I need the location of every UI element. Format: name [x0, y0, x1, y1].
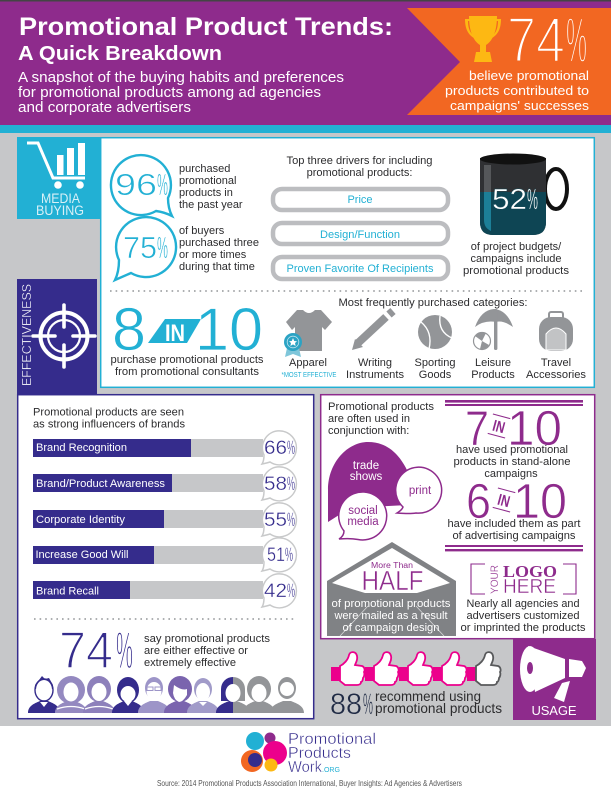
stat: 74% say effective: %	[116, 622, 133, 680]
callout: 74% believe: campaigns' successes	[450, 98, 590, 113]
stat: 96% purchased: %	[157, 167, 168, 202]
logo: promotional products work: .ORG	[322, 767, 340, 774]
driver: proven favorite: Proven Favorite Of Recipients	[286, 263, 434, 275]
panel: brand influence	[18, 395, 314, 719]
top three drivers: Top three drivers for including	[286, 155, 432, 167]
bar: corporate identity: %	[287, 510, 295, 531]
badge: in: IN	[491, 418, 507, 437]
header description: A snapshot of the buying habits and preferences	[18, 70, 344, 86]
your logo here: HERE	[503, 576, 556, 598]
category: apparel: Apparel	[289, 357, 327, 369]
stat: 7 in 10: campaigns	[484, 468, 538, 480]
icon: shopping cart	[27, 143, 85, 189]
bar: increase good will: %	[285, 545, 293, 566]
bar: increase good will: 51	[267, 545, 285, 566]
stat: 96% purchased: promotional	[179, 175, 236, 187]
title: Promotional Product Trends:	[19, 13, 393, 41]
stat: 6 in 10: of advertising campaigns	[452, 530, 576, 542]
category: leisure products: Leisure	[475, 357, 511, 369]
stat: 52% mug	[463, 154, 570, 277]
stat: 75% of buyers: or more times	[179, 249, 247, 261]
text: influencers heading: Promotional products are seen	[33, 406, 184, 418]
bar: brand/product awareness: 58	[264, 474, 287, 495]
source line: Source: 2014 Promotional Products Association International, Buyer Insights: Ad Agencies & Advertisers	[157, 778, 462, 788]
your logo here: Nearly all agencies and	[466, 598, 580, 610]
bar: brand recognition: Brand Recognition	[36, 442, 127, 454]
bar: brand recall: Brand Recall	[36, 586, 99, 598]
bar: corporate identity	[33, 503, 296, 537]
logo: promotional products work: Promotional	[288, 731, 376, 748]
text: influencers heading	[33, 406, 186, 430]
stat: 6 in 10: 10	[513, 475, 567, 529]
text: conjunction heading: Promotional products	[328, 401, 434, 413]
stat: 75% of buyers: of buyers	[179, 225, 225, 237]
stat: 52% mug: campaigns include	[470, 253, 562, 265]
speech bubbles: channels	[328, 442, 442, 540]
stat: 8 in 10: purchase promotional products	[110, 354, 264, 366]
usage: thumbs up rating	[330, 652, 502, 721]
usage: thumbs up rating: %	[363, 688, 373, 721]
stat: 75% of buyers: %	[157, 230, 168, 265]
category: apparel: *MOST EFFECTIVE	[282, 372, 337, 379]
bar: brand/product awareness	[33, 467, 296, 501]
your logo here: LOGO	[503, 562, 557, 581]
logo: promotional products work	[241, 731, 376, 776]
bubble: trade shows	[328, 442, 408, 522]
category: writing instruments: Instruments	[346, 369, 405, 381]
usage: thumbs up rating: promotional products	[375, 700, 502, 716]
stat: 52% mug: promotional products	[463, 265, 570, 277]
bar: brand recognition	[33, 431, 296, 465]
icon: thumbs up	[331, 652, 501, 685]
title	[18, 13, 393, 65]
header description: and corporate advertisers	[18, 100, 191, 116]
stat: 8 in 10: 8	[112, 296, 146, 363]
category: writing instruments	[346, 311, 405, 381]
category: sporting goods: Goods	[419, 369, 452, 381]
stat: 52% mug: %	[527, 184, 538, 216]
text: influencers heading: as strong influencers of brands	[33, 418, 186, 430]
bar: brand recall: %	[287, 581, 295, 602]
bar: corporate identity: 55	[264, 510, 287, 531]
driver: price: Price	[347, 194, 373, 206]
title: A Quick Breakdown	[18, 43, 222, 65]
driver: proven favorite	[273, 257, 448, 279]
icon: logo bubbles	[241, 732, 287, 772]
stat: 75% of buyers	[115, 217, 259, 280]
stat: 74% say effective	[59, 622, 271, 680]
usage: thumbs up rating: 88	[330, 688, 362, 721]
your logo here: YOUR	[489, 565, 501, 594]
stat: 74% say effective: 74	[59, 622, 113, 680]
header banner	[0, 0, 611, 133]
stat: 6 in 10: have included them as part	[448, 518, 580, 530]
purchased categories: Most frequently purchased categories:	[338, 297, 528, 309]
category: sporting goods	[415, 315, 455, 381]
usage: thumbs up rating: recommend using	[375, 688, 481, 704]
stat: 75% of buyers: during that time	[179, 261, 255, 273]
tab: usage	[513, 639, 596, 720]
bar chart: brand influence	[33, 431, 296, 608]
envelope: more than half	[327, 542, 456, 636]
category: travel accessories: Travel	[541, 357, 571, 369]
stat: 7 in 10: have used promotional	[456, 444, 568, 456]
stat: 74% say effective: are either effective or	[144, 645, 248, 657]
stat: 96% purchased: purchased	[179, 163, 230, 175]
stat: 96% purchased: products in	[179, 187, 233, 199]
stat: 7 in 10: 10	[507, 402, 562, 456]
stat: 7 in 10	[454, 402, 570, 480]
your logo here	[460, 562, 586, 634]
logo: promotional products work: Products	[288, 745, 351, 762]
header description	[18, 70, 344, 116]
stat: 52% mug: 52	[492, 184, 527, 216]
bar: increase good will: Increase Good Will	[36, 549, 128, 561]
driver: price	[273, 189, 448, 210]
stat: 75% of buyers: 75	[123, 230, 157, 265]
panel: media buying and effectiveness	[17, 137, 594, 394]
stat: 74% say effective: say promotional products	[144, 633, 271, 645]
icon: trophy	[465, 16, 501, 62]
panel: used in conjunction	[321, 395, 595, 639]
stat: 7 in 10: products in stand-alone	[454, 456, 570, 468]
tab: media buying	[17, 137, 100, 219]
stat: 74% say effective: extremely effective	[144, 657, 236, 669]
stat: 7 in 10: 7	[465, 402, 489, 456]
driver: design/function	[273, 223, 448, 244]
header description: for promotional products among ad agencies	[18, 85, 321, 101]
stat: 75% of buyers: purchased three	[179, 237, 259, 249]
category: sporting goods: Sporting	[415, 357, 455, 369]
stat: 8 in 10	[110, 296, 264, 378]
bar: brand recall	[33, 574, 296, 608]
bar: brand recognition: 66	[264, 438, 287, 459]
top three drivers: promotional products:	[307, 167, 412, 179]
stat: 8 in 10: from promotional consultants	[115, 366, 260, 378]
bubble: social media: media	[347, 516, 379, 528]
tab: media buying: BUYING	[36, 203, 84, 218]
bar: brand recall: 42	[264, 581, 287, 602]
icon: group of people	[28, 676, 304, 713]
bar: brand/product awareness: Brand/Product Awareness	[36, 478, 166, 490]
category: apparel	[282, 310, 337, 379]
category: travel accessories	[526, 312, 587, 381]
purchased categories	[282, 297, 587, 381]
callout: 74% believe: products contributed to	[445, 83, 589, 98]
badge: in: IN	[496, 492, 512, 511]
stat: 8 in 10: IN	[165, 320, 185, 347]
bar: brand recognition: %	[287, 438, 295, 459]
top three drivers	[273, 155, 448, 279]
callout: 74% believe: 74	[507, 4, 565, 76]
your logo here: or imprinted the products	[460, 622, 586, 634]
stat: 52% mug: of project budgets/	[471, 241, 562, 253]
text: conjunction heading: conjunction with:	[328, 425, 409, 437]
stat: 6 in 10	[448, 475, 580, 542]
category: writing instruments: Writing	[358, 357, 392, 369]
tab: effectiveness	[17, 279, 97, 394]
category: leisure products	[471, 309, 515, 381]
stat: 96% purchased: the past year	[179, 199, 243, 211]
text: conjunction heading: are often used in	[328, 413, 410, 425]
stat: 8 in 10: 10	[195, 296, 263, 363]
bar: brand/product awareness: %	[287, 474, 295, 495]
envelope: more than half: HALF	[362, 565, 424, 596]
tab: effectiveness: EFFECTIVENESS	[19, 284, 34, 386]
bar: corporate identity: Corporate Identity	[36, 514, 126, 526]
driver: design/function: Design/Function	[320, 229, 400, 241]
bubble: trade shows: trade	[353, 460, 379, 472]
tab: usage: USAGE	[532, 703, 577, 718]
bubble: social media	[339, 492, 387, 540]
envelope: more than half: More Than	[371, 561, 413, 570]
icon: megaphone	[520, 646, 586, 702]
tab: media buying: MEDIA	[41, 191, 80, 206]
stat: 96% purchased: 96	[115, 167, 157, 202]
logo: promotional products work: Work	[288, 759, 323, 776]
envelope: more than half: of campaign design	[342, 622, 440, 634]
bubble: print: print	[409, 485, 432, 497]
stat: 96% purchased	[111, 155, 243, 216]
callout: 74% believe: believe promotional	[469, 68, 589, 83]
bubble: social media: social	[348, 505, 378, 517]
icon: ribbon badge	[284, 333, 302, 357]
callout: 74% believe	[407, 4, 611, 115]
category: leisure products: Products	[471, 369, 515, 381]
icon: target	[33, 305, 95, 367]
bubble: trade shows: shows	[350, 471, 383, 483]
your logo here: advertisers customized	[466, 610, 580, 622]
icon: mug	[480, 154, 567, 235]
text: conjunction heading	[328, 401, 434, 437]
category: travel accessories: Accessories	[526, 369, 587, 381]
envelope: more than half: of promotional products	[332, 598, 451, 610]
envelope: more than half: were mailed as a result	[334, 610, 448, 622]
stat: 6 in 10: 6	[466, 475, 491, 529]
bar: increase good will	[33, 538, 296, 572]
